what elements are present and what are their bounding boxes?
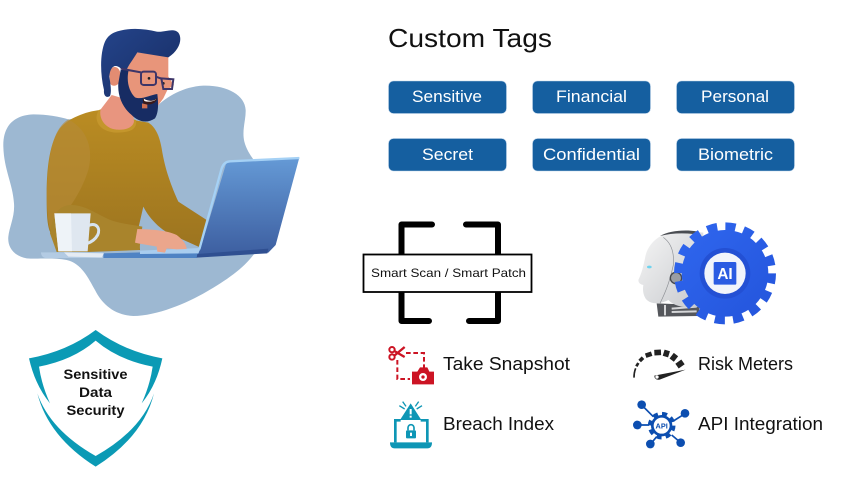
hand — [135, 229, 187, 253]
saucer — [41, 252, 103, 258]
icon: laptop with alert and lock — [390, 402, 432, 448]
hair — [101, 29, 180, 97]
tag: Secret — [388, 138, 506, 171]
tag: Biometric — [676, 138, 794, 171]
sweater collar — [97, 109, 136, 133]
tag: Financial — [532, 81, 650, 114]
glasses — [121, 69, 173, 89]
mouth — [143, 98, 157, 104]
laptop screen — [197, 158, 299, 257]
robot neck — [657, 303, 700, 317]
icon: gauge — [634, 352, 686, 380]
face — [122, 52, 174, 110]
shield text: Data — [79, 385, 113, 400]
beard — [118, 70, 158, 122]
shield text: Security — [66, 403, 125, 418]
label: API Integration — [698, 414, 823, 434]
robot ear — [670, 272, 682, 284]
feature: Take Snapshot — [389, 347, 570, 384]
tag: Confidential — [532, 138, 650, 171]
tag: Personal: Personal — [701, 88, 769, 106]
feature: Risk Meters — [634, 352, 793, 380]
tag: Secret: Secret — [422, 146, 473, 164]
tag: Confidential: Confidential — [543, 146, 640, 164]
robot neck highlights — [665, 305, 697, 315]
AI chip — [714, 262, 736, 285]
icon: API gear network: API — [656, 421, 668, 430]
laptop keyboard base — [102, 251, 200, 258]
tag: Biometric: Biometric — [698, 146, 773, 164]
ear — [109, 67, 121, 86]
shield graphic — [29, 330, 162, 467]
label: Risk Meters — [698, 354, 793, 374]
sweater torso and back arm — [47, 110, 207, 250]
tag: Sensitive — [388, 81, 506, 114]
feature: API Integration — [633, 400, 823, 448]
scan label box — [364, 254, 532, 292]
scan brackets — [402, 224, 498, 321]
shield text — [64, 367, 128, 418]
tag grid — [388, 81, 794, 171]
teeth — [144, 99, 156, 102]
sweater shoulder shading — [47, 119, 90, 230]
tag: Financial: Financial — [556, 88, 627, 106]
cup handle — [86, 225, 99, 244]
keyboard highlight — [140, 248, 200, 254]
illustration: man working at laptop — [3, 29, 299, 316]
scan label text: Smart Scan / Smart Patch — [371, 266, 526, 280]
smart scan frame — [364, 224, 532, 321]
eyes — [148, 77, 165, 85]
sweater front sleeve — [50, 205, 142, 252]
icon: scissors and camera — [389, 347, 434, 384]
lip patch — [142, 103, 147, 108]
label: Breach Index — [443, 414, 554, 434]
screen edge highlight — [199, 158, 299, 249]
tag: Personal — [676, 81, 794, 114]
robot hair panel — [660, 230, 697, 236]
shield badge: Sensitive Data Security — [29, 330, 162, 467]
shield text: Sensitive — [64, 367, 128, 382]
icon: API gear network — [633, 400, 689, 448]
label: Take Snapshot — [443, 354, 570, 374]
saucer top — [64, 252, 104, 257]
robot skull seam — [660, 237, 674, 303]
cup shading — [54, 213, 72, 251]
laptop underside — [197, 249, 268, 258]
AI label: AI — [717, 266, 733, 283]
neck — [100, 95, 140, 130]
feature: Breach Index — [390, 402, 554, 448]
icon: AI robot head with gear — [638, 227, 771, 319]
robot eye — [647, 266, 652, 268]
heading: Custom Tags: Custom Tags — [388, 23, 552, 53]
robot head — [638, 231, 703, 307]
gear hub — [700, 248, 750, 299]
background blob — [3, 86, 257, 316]
tag: Sensitive: Sensitive — [412, 88, 482, 106]
cup — [54, 213, 91, 251]
